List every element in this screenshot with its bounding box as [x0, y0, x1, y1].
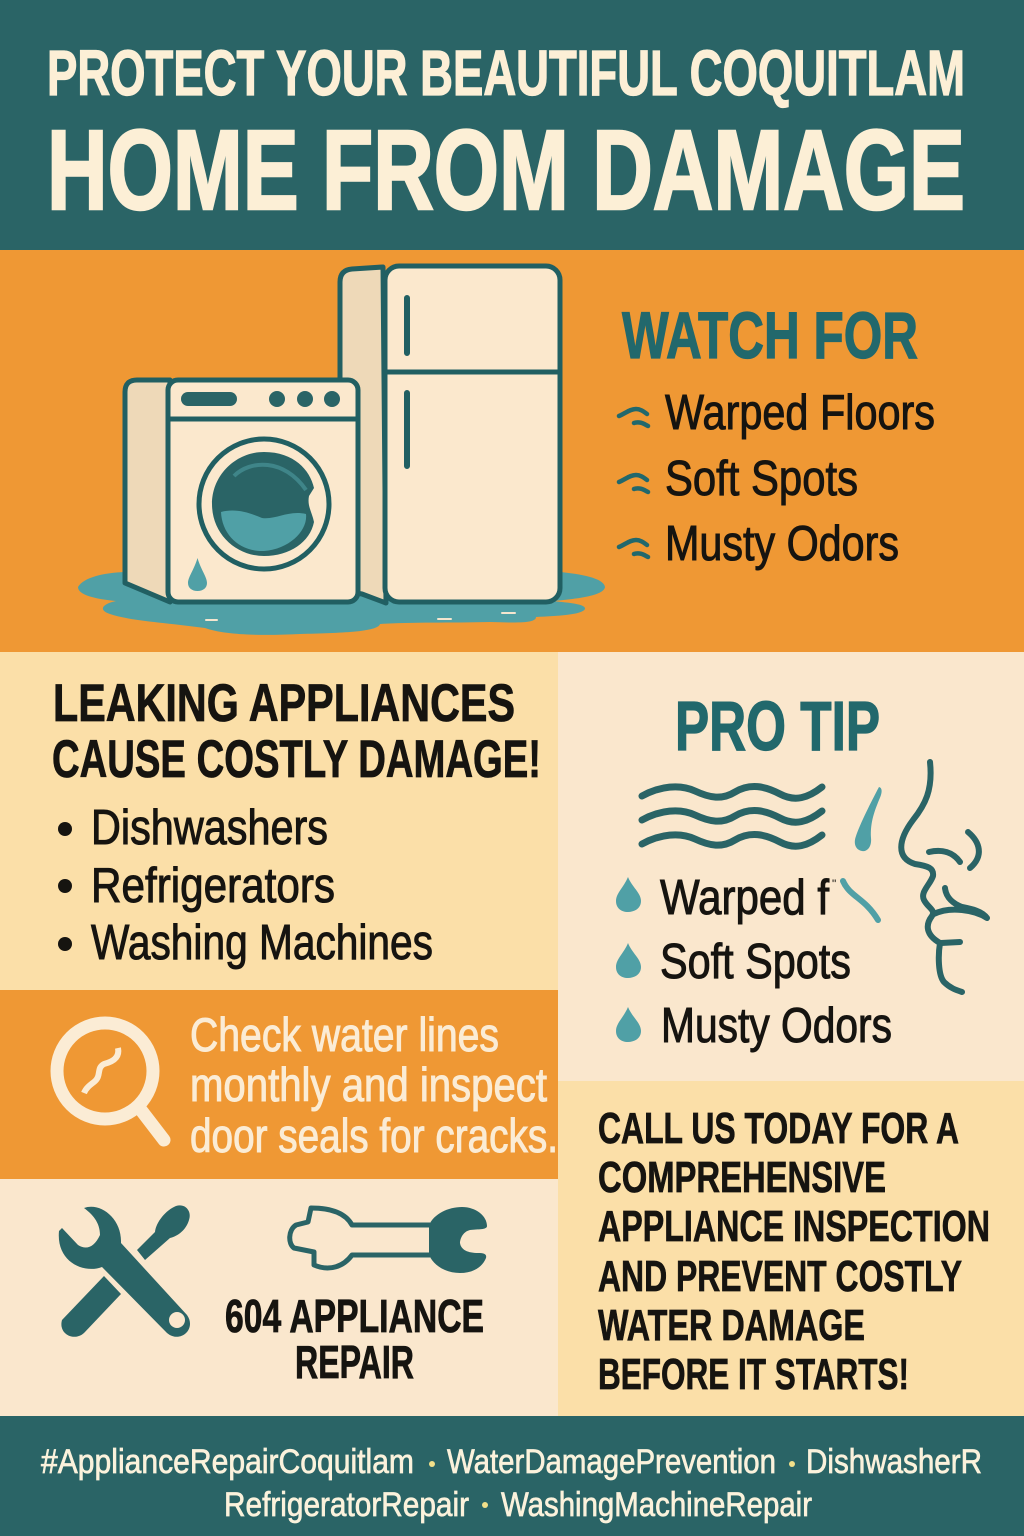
- list: pro tip items: ": [832, 877, 836, 891]
- icon: smelling face: [901, 762, 987, 992]
- icon: crossed wrench and screwdriver: [59, 1205, 190, 1337]
- list: appliances: [58, 801, 433, 970]
- brand name: REPAIR: [295, 1336, 414, 1388]
- heading: pro tip: PRO TIP: [675, 687, 880, 765]
- list: warning signs: Warped Floors: [665, 386, 935, 440]
- puddle highlights: [206, 613, 515, 620]
- heading: leaking appliances: LEAKING APPLIANCES: [53, 674, 515, 733]
- illustration: leaking washer and fridge: [78, 266, 605, 635]
- brand name: [225, 1290, 484, 1388]
- washer controls: [181, 392, 237, 406]
- tip text: door seals for cracks.: [190, 1109, 558, 1162]
- panel: call to action: [558, 1081, 1024, 1416]
- panel: hashtag footer: [0, 1416, 1024, 1536]
- list: warning signs: Soft Spots: [665, 452, 858, 506]
- call to action text: [598, 1104, 990, 1399]
- call to action text: COMPREHENSIVE: [598, 1153, 886, 1202]
- list: pro tip items: Soft Spots: [660, 935, 851, 989]
- panel: monthly check tip: [0, 990, 558, 1179]
- list: pro tip items: [616, 871, 892, 1053]
- list: warning signs: [619, 386, 935, 571]
- washer door: [199, 439, 329, 569]
- panel: leaking appliances: CAUSE COSTLY DAMAGE!: [52, 730, 541, 789]
- call to action text: WATER DAMAGE: [598, 1301, 865, 1350]
- heading: watch for: WATCH FOR: [622, 298, 918, 372]
- brand name: 604 APPLIANCE: [225, 1290, 484, 1342]
- hashtags: WashingMachineRepair: [501, 1486, 812, 1524]
- list: appliances: Washing Machines: [91, 916, 433, 970]
- icon: waves: [642, 786, 822, 846]
- tip text: Check water lines: [190, 1008, 499, 1061]
- hashtags: RefrigeratorRepair: [224, 1486, 469, 1524]
- fridge: [340, 266, 560, 603]
- puddle: [78, 572, 605, 635]
- washing machine: [125, 380, 358, 602]
- list: warning signs: Musty Odors: [665, 517, 899, 571]
- icon: stray mark: [843, 881, 878, 920]
- panel: watch for: [0, 250, 1024, 652]
- hashtags: DishwasherR: [806, 1443, 982, 1481]
- list: pro tip items: Musty Odors: [661, 999, 892, 1053]
- panel: pro tip: [558, 652, 1024, 1081]
- hashtags: #ApplianceRepairCoquitlam: [41, 1443, 414, 1481]
- hashtags: [41, 1443, 982, 1524]
- tip text: monthly and inspect: [190, 1058, 547, 1111]
- icon: magnifying glass: [57, 1023, 164, 1140]
- list: pro tip items: Warped f: [660, 871, 829, 925]
- list: appliances: Refrigerators: [91, 859, 335, 913]
- list: appliances: Dishwashers: [91, 801, 328, 855]
- call to action text: BEFORE IT STARTS!: [598, 1350, 909, 1399]
- tip text: [190, 1008, 558, 1162]
- panel: brand: [0, 1179, 558, 1416]
- panel: title banner: [0, 0, 1024, 250]
- water drop on washer: [188, 558, 207, 591]
- hashtags: WaterDamagePrevention: [447, 1443, 776, 1481]
- icon: outlined wrench: [290, 1207, 487, 1273]
- panel: leaking appliances: [0, 652, 558, 990]
- icon: drip: [855, 787, 882, 851]
